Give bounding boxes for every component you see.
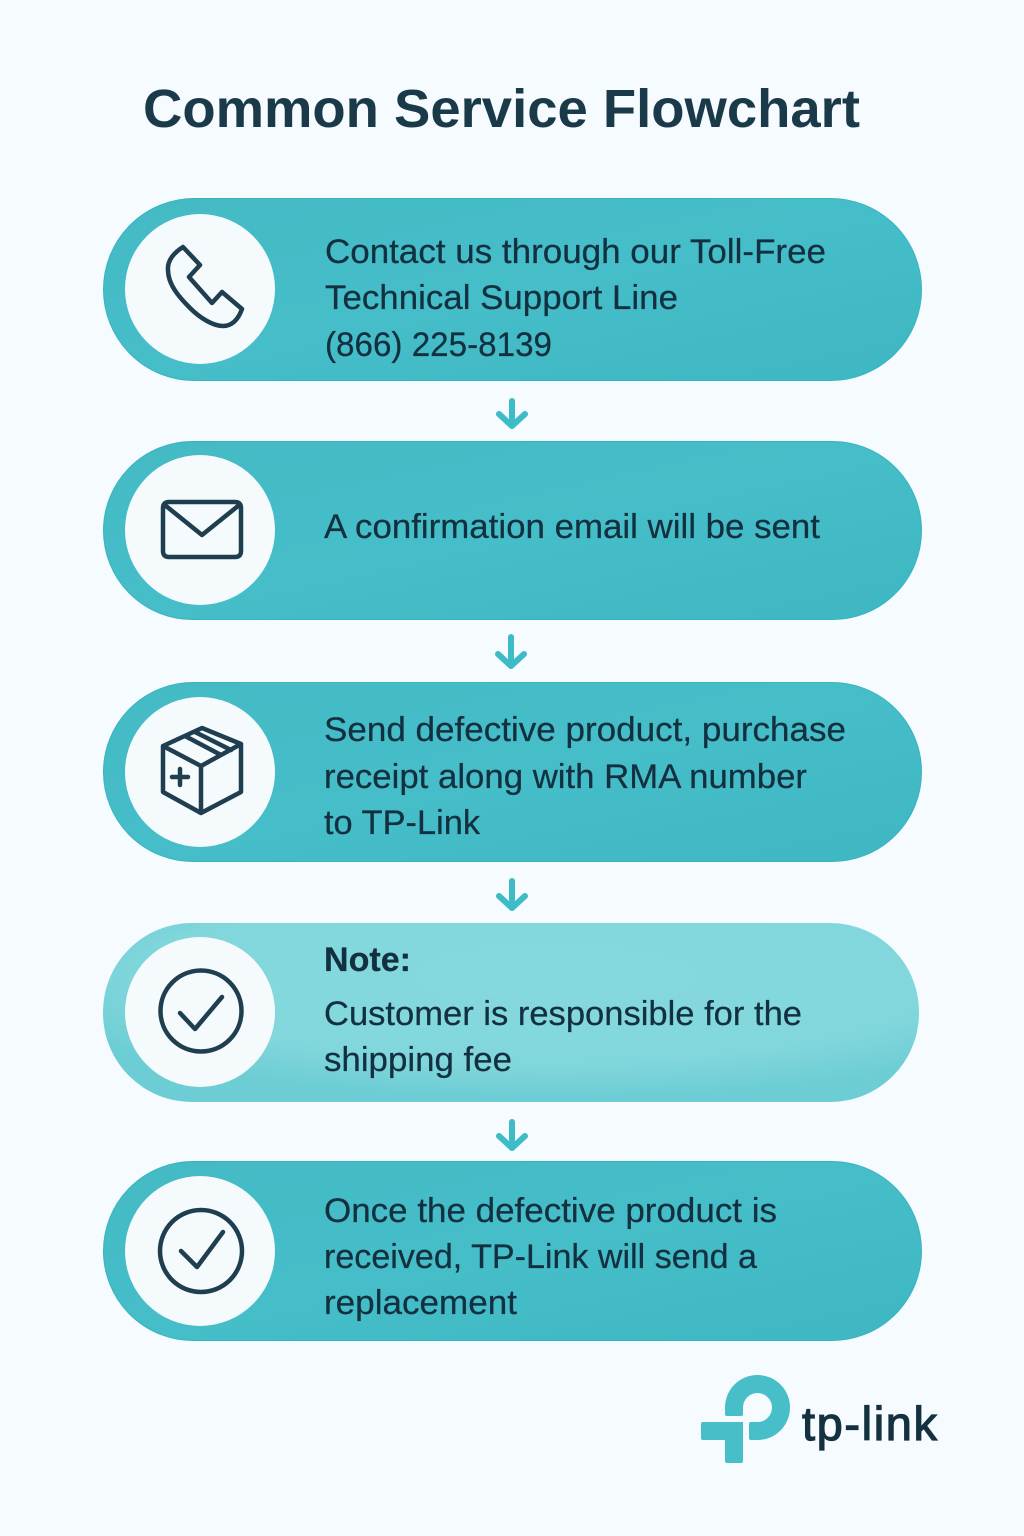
icon: package box bbox=[163, 728, 241, 813]
logo: tp-link bbox=[701, 1375, 938, 1463]
step 3 text: receipt along with RMA number bbox=[324, 758, 807, 796]
arrow 4 bbox=[499, 1122, 525, 1148]
icon: phone bbox=[168, 247, 242, 326]
icon: check circle final bbox=[160, 1210, 242, 1292]
title: Common Service Flowchart bbox=[143, 79, 860, 139]
step 5 text: Once the defective product is bbox=[324, 1192, 777, 1230]
step 1 text: Contact us through our Toll-Free bbox=[325, 233, 826, 271]
panel: note bbox=[103, 923, 919, 1102]
step 1 text: Technical Support Line bbox=[325, 279, 678, 317]
arrow 3 bbox=[499, 881, 525, 908]
step 3 text: to TP-Link bbox=[324, 804, 481, 842]
note text bbox=[324, 941, 802, 1079]
arrow 2 bbox=[498, 637, 524, 666]
note text: Note: bbox=[324, 941, 411, 979]
step 3 text: Send defective product, purchase bbox=[324, 711, 846, 749]
step 2 text: A confirmation email will be sent bbox=[324, 508, 821, 546]
arrow 1 bbox=[499, 401, 525, 426]
panel: step 3 send product bbox=[104, 682, 922, 862]
note text: shipping fee bbox=[324, 1041, 512, 1079]
step 5 text: received, TP-Link will send a bbox=[324, 1238, 757, 1276]
step 1 text: (866) 225-8139 bbox=[325, 326, 552, 364]
step 5 text bbox=[324, 1192, 777, 1322]
panel: step 5 replacement bbox=[104, 1162, 922, 1340]
note text: Customer is responsible for the bbox=[324, 995, 802, 1033]
step 1 text bbox=[325, 233, 826, 364]
step 3 text bbox=[324, 711, 846, 842]
logo wordmark: tp-link bbox=[802, 1397, 938, 1450]
panel: step 1 contact bbox=[104, 198, 922, 380]
icon: check circle bbox=[160, 970, 242, 1052]
panel: step 2 email bbox=[104, 442, 922, 620]
icon: logo mark bbox=[701, 1375, 790, 1463]
icon: envelope bbox=[163, 502, 241, 557]
step 5 text: replacement bbox=[324, 1284, 518, 1322]
